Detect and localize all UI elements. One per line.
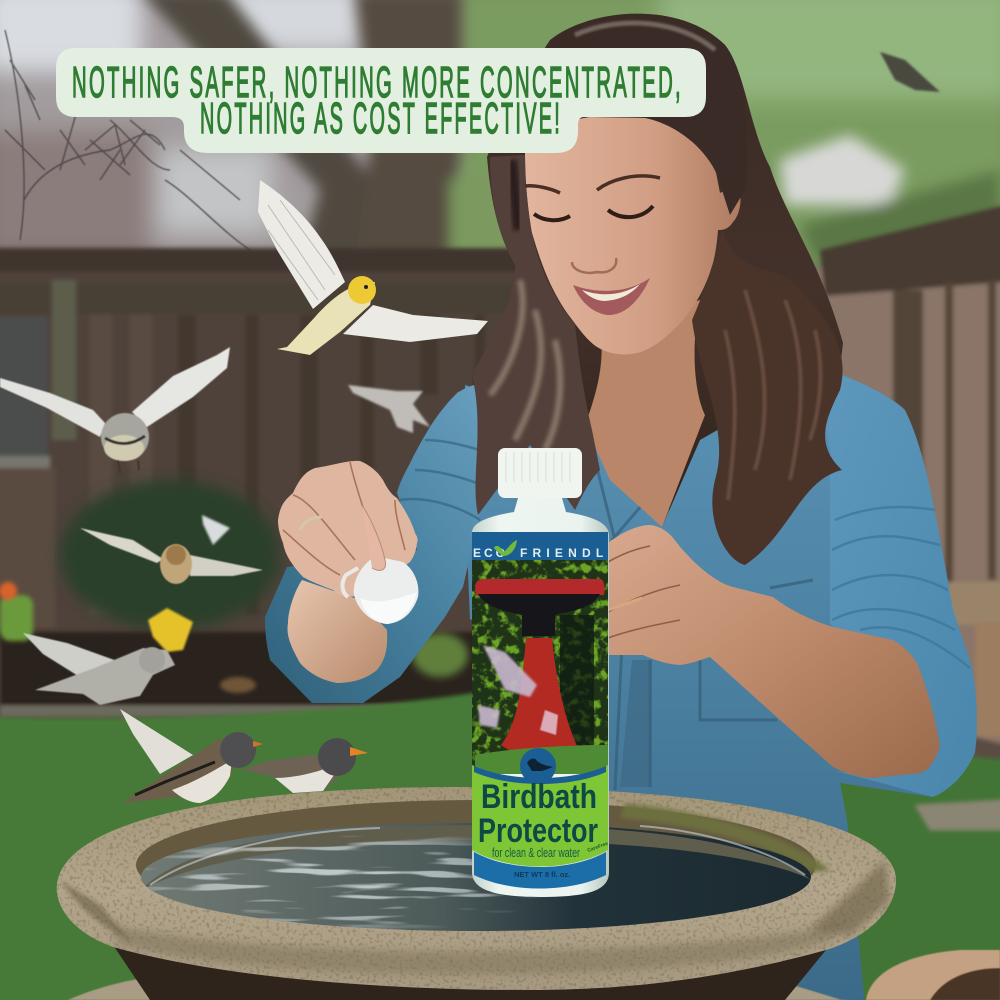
lawn — [0, 692, 1000, 1000]
neck and chest — [585, 300, 705, 527]
eco friendly text: FRIENDL — [520, 546, 608, 560]
stone slab and terracotta pot, bottom — [68, 950, 1000, 1000]
eyes, brows, nose and smile — [525, 176, 660, 315]
garden bed and shrubs — [0, 480, 480, 717]
moss patch — [620, 803, 830, 872]
small white bird — [202, 515, 230, 545]
stone rim — [57, 787, 896, 990]
hair, back layer — [472, 14, 843, 565]
water highlight line — [150, 826, 805, 885]
product name: Birdbath — [481, 778, 597, 816]
ring — [300, 517, 322, 530]
bottle body — [472, 498, 609, 897]
water — [141, 823, 811, 931]
hair, right lock — [692, 230, 843, 565]
small distant bird — [348, 385, 430, 433]
finger creases — [283, 462, 405, 575]
blue top band — [470, 532, 610, 560]
inner wall — [136, 800, 816, 930]
dark bird, top right — [880, 52, 940, 92]
product label — [470, 532, 610, 888]
bird badge — [520, 748, 556, 784]
green product panel — [472, 765, 608, 866]
right sleeve folds — [832, 507, 970, 668]
headline text — [72, 58, 683, 143]
wooden fence, left — [0, 248, 520, 648]
left forearm — [288, 580, 387, 683]
finch on rim, left — [120, 709, 263, 803]
left sleeve — [265, 383, 492, 703]
headline banner — [56, 48, 706, 153]
shirt torso — [465, 365, 975, 1000]
net weight: NET WT 8 fl. oz. — [514, 870, 570, 879]
birdbath — [50, 780, 900, 1000]
tan bird — [80, 528, 263, 584]
far edge of water — [141, 825, 811, 890]
wooden fence, right — [815, 205, 1000, 745]
yellow bird in flight — [258, 180, 488, 355]
face — [525, 117, 741, 354]
bottle cap — [498, 448, 582, 498]
blue bottom band — [474, 852, 606, 888]
rim texture and moss — [50, 780, 900, 995]
leaf icon — [494, 540, 517, 556]
garden photo on label — [472, 558, 608, 785]
finch on rim, right — [242, 738, 368, 793]
thumb over scoop — [362, 505, 386, 570]
product label: Protector — [478, 812, 598, 850]
right rolled sleeve — [815, 368, 977, 797]
left hand — [278, 461, 418, 597]
grey bird, upper left — [0, 347, 230, 473]
measuring scoop — [342, 556, 418, 624]
water ripples — [144, 836, 540, 929]
right forearm and hand — [607, 525, 940, 778]
shirt collar and pocket seams — [590, 440, 813, 790]
bowl underside — [113, 945, 826, 1000]
tagline: for clean & clear water — [492, 845, 580, 860]
yellow blurred bird — [148, 608, 193, 652]
hair above forehead — [524, 15, 747, 215]
enzyme mark: CareFree — [587, 841, 609, 854]
headline text: NOTHING AS COST EFFECTIVE! — [200, 94, 562, 143]
left sleeve folds — [400, 440, 495, 520]
product bottle — [470, 448, 610, 897]
grey bird on left — [23, 633, 175, 705]
woman — [265, 14, 977, 1000]
hair, left lock — [472, 155, 600, 515]
bare tree branches — [5, 30, 250, 250]
eco friendly text: ECO — [473, 546, 508, 560]
